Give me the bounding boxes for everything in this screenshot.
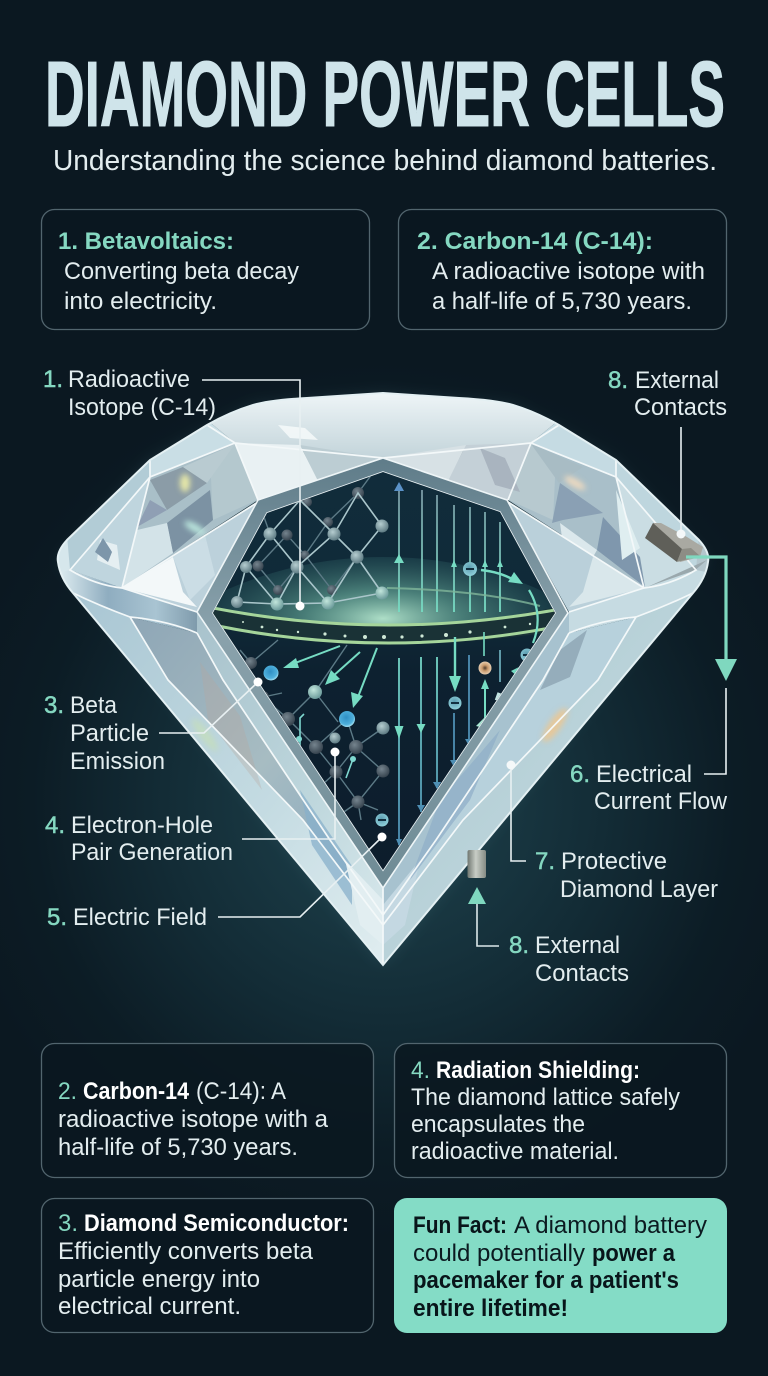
panel: fun fact: Fun Fact: bbox=[413, 1212, 507, 1239]
label 8: external contacts bottom: 8. bbox=[509, 932, 529, 959]
panel: fun fact: could potentially bbox=[413, 1240, 585, 1267]
label 8: external contacts top: External bbox=[635, 367, 719, 394]
panel: fun fact: power a bbox=[592, 1240, 676, 1267]
panel: diamond semiconductor: Diamond Semiconductor: bbox=[84, 1210, 349, 1237]
panel: carbon-14 bottom: (C-14): A bbox=[196, 1078, 286, 1105]
label 3: beta particle emission bbox=[44, 678, 262, 775]
label 4: electron-hole pair generation: 4. bbox=[45, 812, 65, 839]
contact: right metal block bbox=[645, 523, 703, 562]
label 6: electrical current flow: 6. bbox=[570, 761, 590, 788]
panel: radiation shielding: 4. bbox=[411, 1057, 430, 1084]
arrow: bottom contact bbox=[468, 887, 499, 946]
panel: carbon-14 bottom: half-life of 5,730 years. bbox=[58, 1134, 298, 1161]
charge carriers bbox=[448, 632, 530, 766]
panel: radiation shielding: The diamond lattice safely bbox=[411, 1084, 680, 1111]
panel: fun fact: entire lifetime! bbox=[413, 1295, 568, 1322]
panel: radiation shielding: radioactive material. bbox=[411, 1138, 619, 1165]
subtitle: Understanding the science behind diamond batteries. bbox=[53, 145, 717, 177]
label 4: electron-hole pair generation: Pair Generation bbox=[71, 839, 233, 866]
panel: betavoltaics: Converting beta decay bbox=[64, 258, 299, 285]
label 6: electrical current flow: Electrical bbox=[596, 761, 692, 788]
inner frame bbox=[197, 458, 568, 888]
label 8: external contacts top: 8. bbox=[608, 367, 628, 394]
downward field arrows bbox=[394, 655, 473, 846]
diamond facets right bbox=[383, 393, 716, 965]
ring band bbox=[205, 606, 562, 643]
panel: carbon-14 bottom: Carbon-14 bbox=[83, 1078, 190, 1105]
label 6: electrical current flow: Current Flow bbox=[594, 788, 728, 815]
lower lattice bbox=[240, 640, 390, 826]
panel: diamond semiconductor: electrical current. bbox=[58, 1293, 241, 1320]
panel: diamond semiconductor bbox=[42, 1198, 374, 1332]
label 8: external contacts top bbox=[608, 367, 727, 538]
arrow: electrical current flow bbox=[686, 557, 737, 681]
panel: carbon-14 bottom: 2. bbox=[58, 1078, 77, 1105]
label 8: external contacts top: Contacts bbox=[634, 394, 727, 421]
panel: diamond semiconductor: Efficiently converts beta bbox=[58, 1238, 314, 1265]
diamond facet edges bbox=[58, 393, 708, 965]
panel: betavoltaics: 1. Betavoltaics: bbox=[58, 228, 234, 255]
label 1: radioactive isotope: Radioactive bbox=[68, 366, 190, 393]
inner window bbox=[213, 472, 555, 870]
label 6: electrical current flow bbox=[570, 688, 728, 815]
upward field arrows bbox=[394, 482, 503, 612]
label 5: electric field: 5. bbox=[47, 904, 67, 931]
panel: carbon-14 top: A radioactive isotope with bbox=[432, 258, 705, 285]
label 3: beta particle emission: 3. bbox=[44, 692, 64, 719]
panel: carbon-14 bottom bbox=[42, 1044, 374, 1178]
label 4: electron-hole pair generation: Electron-Hole bbox=[71, 812, 213, 839]
panel: radiation shielding bbox=[394, 1044, 726, 1178]
label 7: protective diamond layer: Diamond Layer bbox=[560, 876, 718, 903]
rainbow reflections bbox=[180, 474, 587, 754]
label 3: beta particle emission: Beta bbox=[70, 692, 118, 719]
contact: bottom metal pin bbox=[468, 850, 486, 878]
panel: betavoltaics bbox=[42, 210, 370, 330]
back ring bbox=[387, 588, 540, 606]
panel: radiation shielding: encapsulates the bbox=[411, 1111, 585, 1138]
label 7: protective diamond layer bbox=[506, 760, 718, 903]
glowing disc bbox=[216, 557, 552, 634]
label 1: radioactive isotope: Isotope (C-14) bbox=[68, 394, 216, 421]
diamond soft glow bbox=[58, 393, 708, 965]
label 8: external contacts bottom bbox=[509, 932, 629, 987]
label 7: protective diamond layer: Protective bbox=[561, 848, 667, 875]
upper lattice back bbox=[252, 470, 375, 595]
panel: carbon-14 top: a half-life of 5,730 years. bbox=[432, 288, 692, 315]
label 3: beta particle emission: Emission bbox=[70, 748, 165, 775]
panel: fun fact: A diamond battery bbox=[514, 1212, 707, 1239]
label 5: electric field: Electric Field bbox=[73, 904, 207, 931]
upper lattice front bbox=[231, 493, 388, 610]
label 7: protective diamond layer: 7. bbox=[535, 848, 555, 875]
diamond facets left bbox=[50, 393, 383, 965]
label 1: radioactive isotope bbox=[43, 366, 304, 610]
glowing window contents bbox=[205, 470, 562, 846]
label 8: external contacts bottom: Contacts bbox=[535, 960, 629, 987]
electron with curved arrow bbox=[463, 562, 538, 643]
panel: carbon-14 bottom: radioactive isotope with a bbox=[58, 1106, 329, 1133]
label 1: radioactive isotope: 1. bbox=[43, 366, 63, 393]
label 3: beta particle emission: Particle bbox=[70, 720, 149, 747]
panel: fun fact bbox=[394, 1198, 727, 1333]
label 5: electric field bbox=[47, 832, 386, 931]
panel: fun fact: pacemaker for a patient's bbox=[413, 1267, 679, 1294]
panel: diamond semiconductor: particle energy into bbox=[58, 1266, 260, 1293]
label 4: electron-hole pair generation bbox=[45, 748, 340, 866]
panel: betavoltaics: into electricity. bbox=[64, 288, 217, 315]
panel: radiation shielding: Radiation Shielding: bbox=[436, 1057, 640, 1084]
panel: carbon-14 top bbox=[398, 210, 726, 330]
beta emission arrows bbox=[283, 646, 377, 708]
diamond illustration bbox=[50, 393, 716, 965]
panel: diamond semiconductor: 3. bbox=[58, 1210, 78, 1237]
label 8: external contacts bottom: External bbox=[535, 932, 620, 959]
panel: carbon-14 top: 2. Carbon-14 (C-14): bbox=[417, 228, 653, 255]
